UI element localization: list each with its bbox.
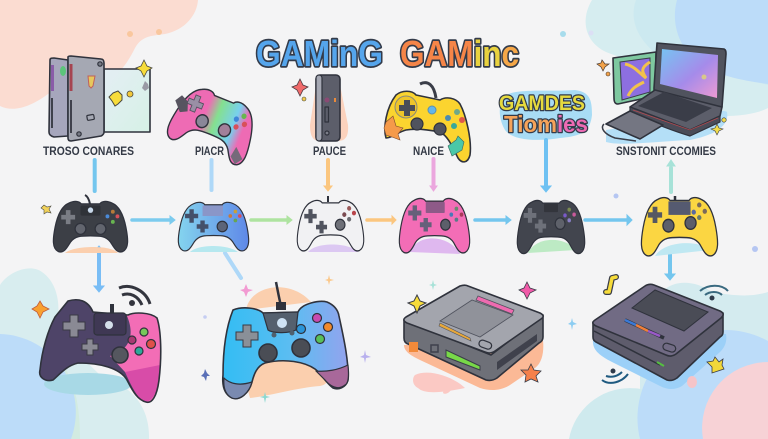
- callout: games times: [499, 90, 592, 140]
- top item: slim console: [292, 75, 348, 141]
- top item: yellow controller: [384, 83, 470, 162]
- title: GAMinG: [256, 33, 383, 74]
- background blob: bottom-right: [569, 283, 768, 439]
- controller: pink: [399, 198, 470, 254]
- arrows: [94, 140, 675, 292]
- label: NAICE: [413, 144, 444, 158]
- label: PAUCE: [313, 144, 346, 158]
- top item: laptop and tablet: [597, 43, 727, 144]
- title: GAMinc: [400, 33, 519, 74]
- controller: white: [297, 196, 364, 252]
- label: TROSO CONARES: [43, 144, 134, 158]
- controller: charcoal: [517, 200, 585, 254]
- background blob: top-left peach: [0, 0, 198, 109]
- controller: dark: [41, 195, 128, 253]
- controller: light blue: [178, 202, 249, 252]
- console: grey: [404, 280, 577, 394]
- background blob: bottom-left: [0, 268, 149, 439]
- title: [256, 33, 519, 74]
- callout: games times: Tiomies: [504, 111, 588, 137]
- background blob: top-right: [586, 0, 768, 116]
- top item: multicolour controller: [161, 80, 264, 167]
- controller: yellow: [641, 196, 718, 256]
- label: PIACR: [195, 144, 224, 158]
- callout: games times: GAMDES: [499, 92, 585, 115]
- large controller: blue: [201, 275, 371, 403]
- large controller: purple and pink: [30, 286, 170, 410]
- top item: tower consoles: [49, 56, 152, 141]
- decorative dots: [127, 29, 758, 319]
- console: dark purple: [593, 277, 728, 389]
- label: SNSTONIT CCOMIES: [616, 144, 716, 158]
